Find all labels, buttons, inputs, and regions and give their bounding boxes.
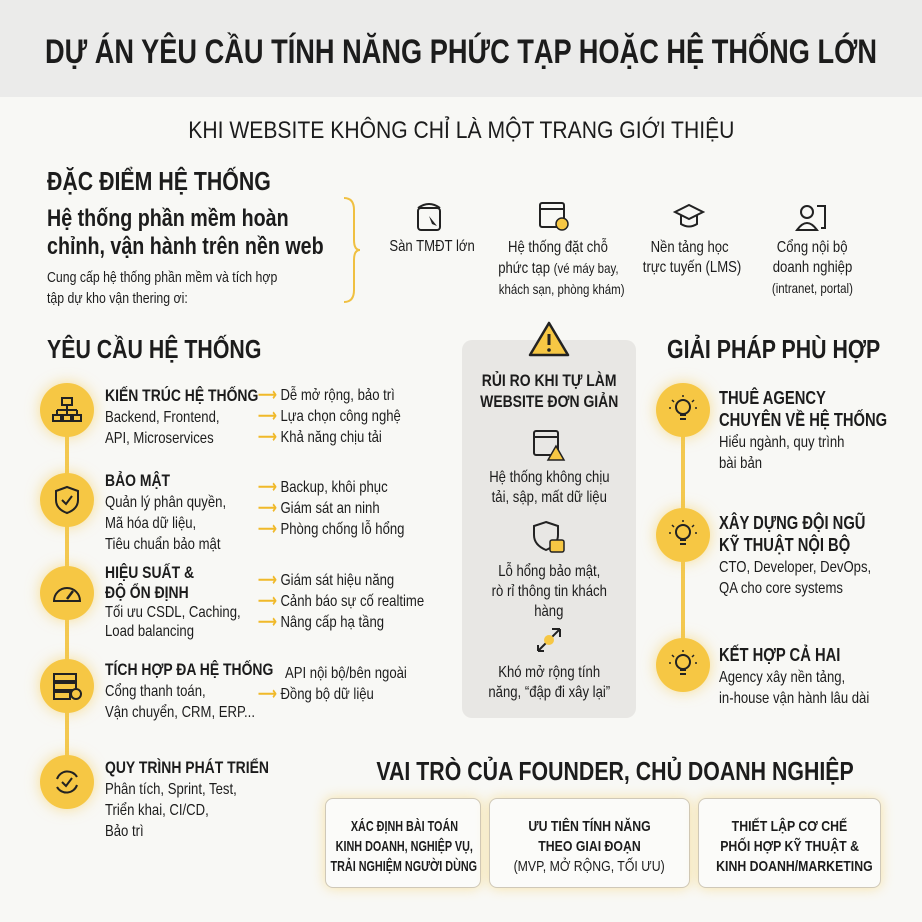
subtitle: KHI WEBSITE KHÔNG CHỈ LÀ MỘT TRANG GIỚI THIỆU [188, 117, 734, 144]
icon: shop [417, 203, 441, 231]
text block: system description: Cung cấp hệ thống phần mềm và tích hợp [47, 269, 277, 286]
icon: server [40, 659, 94, 713]
label: đặt chỗ: khách sạn, phòng khám) [499, 281, 625, 297]
requirement 2: ⟶ Giám sát an ninh [258, 500, 380, 517]
risk 1 [489, 430, 609, 506]
label: sàn tmđt: Sàn TMĐT lớn [389, 238, 475, 255]
requirement 5: Triển khai, CI/CD, [105, 802, 209, 819]
icon: cycle [40, 755, 94, 809]
timeline line right [681, 410, 685, 665]
label: LMS: trực tuyến (LMS) [643, 259, 741, 276]
box 1: XÁC ĐỊNH BÀI TOÁN [350, 818, 458, 835]
requirement 2 [32, 464, 404, 553]
requirement 1 [32, 374, 401, 447]
requirement 3: Tối ưu CSDL, Caching, [105, 604, 241, 621]
solution 3: in-house vận hành lâu dài [719, 690, 869, 707]
label: đặt chỗ: phức tạp (vé máy bay, [498, 260, 619, 277]
system types [389, 202, 853, 297]
icon: bulb [656, 508, 710, 562]
requirement 3: HIỆU SUẤT & [105, 563, 194, 582]
requirement 2: ⟶ Phòng chống lỗ hổng [258, 521, 404, 538]
box 1: TRẢI NGHIỆM NGƯỜI DÙNG [331, 858, 477, 875]
icon: gauge [40, 566, 94, 620]
box 2: (MVP, MỞ RỘNG, TỐI ƯU) [514, 858, 665, 875]
requirement 1: ⟶ Lựa chọn công nghệ [258, 408, 401, 425]
solution 2: XÂY DỰNG ĐỘI NGŨ [719, 513, 865, 533]
title: DỰ ÁN YÊU CẦU TÍNH NĂNG PHỨC TẠP HOẶC HỆ THỐNG LỚN [45, 33, 877, 71]
solution 1: Hiểu ngành, quy trình [719, 434, 844, 451]
requirement 5 [32, 746, 269, 840]
icon: architecture [40, 383, 94, 437]
box 3: THIẾT LẬP CƠ CHẾ [732, 818, 847, 835]
text block: system description: Hệ thống phần mềm hoàn [47, 205, 289, 232]
box 2: ƯU TIÊN TÍNH NĂNG [528, 818, 651, 835]
label: đặt chỗ [498, 238, 625, 297]
solution 1: bài bản [719, 455, 762, 472]
requirement 4: ⟶ Đồng bộ dữ liệu [258, 686, 374, 703]
risk 2 [491, 521, 607, 620]
requirement 4: API nội bộ/bên ngoài [285, 665, 407, 682]
solution 1: THUÊ AGENCY [719, 388, 826, 408]
heading: vai trò founder: VAI TRÒ CỦA FOUNDER, CHỦ DOANH NGHIỆP [376, 756, 854, 786]
requirement 2: ⟶ Backup, khôi phục [258, 479, 388, 496]
label: LMS: Nền tảng học [650, 239, 729, 256]
solution 3: Agency xây nền tảng, [719, 669, 845, 686]
requirement 2: BẢO MẬT [105, 471, 170, 490]
icon: shield [40, 473, 94, 527]
risk 2: hàng [534, 603, 564, 620]
requirement 4: TÍCH HỢP ĐA HỆ THỐNG [105, 660, 273, 679]
requirement 1: ⟶ Dễ mở rộng, bảo trì [258, 387, 395, 404]
requirement 4 [32, 650, 407, 722]
box 1: KINH DOANH, NGHIỆP VỤ, [335, 838, 473, 855]
requirement 4: Vận chuyển, CRM, ERP... [105, 704, 255, 721]
box 2: THEO GIAI ĐOẠN [538, 838, 641, 855]
box 2 [489, 798, 690, 888]
risk 3: năng, “đập đi xây lại” [488, 684, 610, 701]
requirement 1: ⟶ Khả năng chịu tải [258, 429, 382, 446]
risk 3 [488, 628, 610, 701]
risk 1: tải, sập, mất dữ liệu [491, 489, 607, 506]
timeline line left [65, 410, 69, 782]
requirement 3: ⟶ Giám sát hiệu năng [258, 572, 394, 589]
title bar [0, 0, 922, 97]
text block: system description [47, 205, 324, 307]
panel: risks [462, 340, 636, 718]
icon: bulb [656, 638, 710, 692]
requirement 4: Cổng thanh toán, [105, 683, 206, 700]
icon: booking [539, 202, 569, 231]
label: đặt chỗ: Hệ thống đặt chỗ [508, 239, 607, 256]
requirement 5: Bảo trì [105, 823, 144, 840]
solution 2: KỸ THUẬT NỘI BỘ [719, 535, 850, 555]
label: cổng nội bộ: (intranet, portal) [772, 280, 853, 296]
risk 2: Lỗ hổng bảo mật, [498, 563, 600, 580]
icon: bulb [656, 383, 710, 437]
solution 1: CHUYÊN VỀ HỆ THỐNG [719, 410, 887, 430]
requirement 1: KIẾN TRÚC HỆ THỐNG [105, 386, 258, 405]
requirement 3: ĐỘ ỔN ĐỊNH [105, 583, 189, 602]
requirement 5: Phân tích, Sprint, Test, [105, 781, 237, 798]
heading: giải pháp phù hợp: GIẢI PHÁP PHÙ HỢP [667, 334, 880, 364]
requirement 3: ⟶ Cảnh báo sự cố realtime [258, 593, 424, 610]
requirement 2: Mã hóa dữ liệu, [105, 515, 196, 532]
text block: system description: chỉnh, vận hành trên nền web [47, 233, 324, 260]
label: LMS [642, 239, 741, 276]
risk heading: RỦI RO KHI TỰ LÀM [482, 371, 616, 390]
requirement 2: Tiêu chuẩn bảo mật [105, 536, 220, 553]
box 3: PHỐI HỢP KỸ THUẬT & [720, 838, 859, 855]
requirement 1: API, Microservices [105, 430, 214, 447]
requirement 3: Load balancing [105, 623, 194, 640]
solution 1 [648, 374, 887, 472]
risk heading [480, 371, 618, 411]
box 1 [325, 798, 481, 888]
requirement 5: QUY TRÌNH PHÁT TRIỂN [105, 758, 269, 777]
icon: user portal [795, 205, 826, 231]
requirement 1: Backend, Frontend, [105, 409, 220, 426]
risk 1: Hệ thống không chịu [489, 469, 609, 486]
label: cổng nội bộ: doanh nghiệp [773, 259, 852, 276]
solution 2: QA cho core systems [719, 580, 843, 597]
risk heading: WEBSITE ĐƠN GIẢN [480, 392, 618, 411]
icon: warning [528, 322, 570, 356]
heading: yêu cầu hệ thống: YÊU CẦU HỆ THỐNG [47, 334, 261, 364]
solution 3: KẾT HỢP CẢ HAI [719, 645, 840, 665]
box 3 [698, 798, 881, 888]
requirement 3 [32, 558, 424, 640]
box 3: KINH DOANH/MARKETING [716, 858, 873, 875]
solution 2: CTO, Developer, DevOps, [719, 559, 871, 576]
label: cổng nội bộ [772, 239, 853, 296]
icon: graduation cap [673, 204, 705, 228]
solution 3 [648, 630, 869, 707]
solution 2 [648, 500, 871, 597]
label: cổng nội bộ: Cổng nội bộ [777, 239, 848, 256]
risk 2: rò rỉ thông tin khách [491, 583, 607, 600]
text block: system description: tập dự kho vận thering ơi: [47, 290, 188, 307]
requirement 2: Quản lý phân quyền, [105, 494, 226, 511]
risk 3: Khó mở rộng tính [498, 664, 600, 681]
requirement 3: ⟶ Nâng cấp hạ tầng [258, 614, 384, 631]
heading: đặc điểm hệ thống: ĐẶC ĐIỂM HỆ THỐNG [47, 166, 271, 196]
brace [344, 197, 360, 303]
